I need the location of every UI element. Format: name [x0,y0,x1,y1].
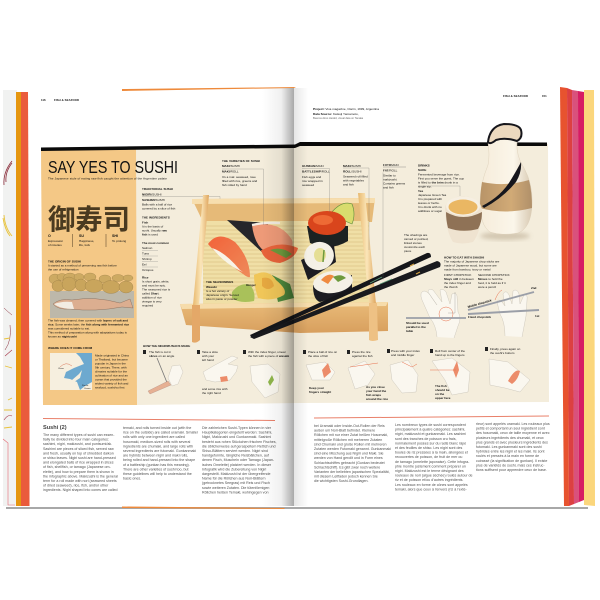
drinks: Tea [418,189,423,193]
seasoning label [206,280,257,301]
step 6: Press with your index [391,349,420,353]
drinks: leaves or herbs. [418,201,440,205]
body text column 4: mit diesem Leitfaden jedoch kennen Sie [314,475,378,479]
chopstick note: linked stones [404,241,422,245]
chopstick hands: table [406,329,413,333]
drinks [418,164,464,213]
origin of sushi: THE ORIGIN OF SUSHI [48,260,81,264]
body text column 1: ingredients. Nigiri shaped into cones are called [43,488,118,492]
body text column 2: temaki, and rolls turned inside out (with the [123,426,191,430]
tray: bamboo mat [203,221,369,304]
body text column 6: des hosomaki, ceux de taille moyenne et avec [476,431,550,435]
body text column 5: riz et de poisson et/ou d'autres ingrédients. [395,478,463,482]
futomaki label: Contains greens [383,182,406,186]
body text column 2: are hybrids between nigiri and maki rolls, [123,454,188,458]
further nigiri steps [303,347,530,401]
body text column 2: basic ones. [123,477,141,481]
body text column 4: Zutaten werden Futomaki genannt. Gunkanmaki [314,447,391,451]
traditional sushi column: vinegar is very [142,300,162,304]
hoso roll label: MAKI/SUSHI [343,164,361,168]
drinks: additives or sugar [418,209,442,213]
body text column 1: The many different types of sushi can essen- [43,433,115,437]
step 4 [303,350,337,394]
body text column 2: several ingredients are futomaki. Gunkanmaki [123,449,196,453]
black top bar [41,142,547,151]
varieties of sushi: filled with rice, greens and [222,179,258,183]
traditional sushi column: Fish [142,220,148,224]
origin of sushi: rice. Some weeks later, the fish along with fermented rice [48,322,129,326]
body text column 3: Shiso-Blättern serviert werden. Nigiri sind [202,449,268,453]
hand one [406,289,466,338]
body text column 2: rice on the outside) are called uramaki. Smaller [123,431,199,435]
step 6 [387,349,420,393]
body text column 6: rieur) sont appelés uramaki. Les rouleaux plus [476,422,550,426]
how to eat with shashi [444,256,510,289]
infographic background panels [41,143,549,405]
body text column 5: Les rouleaux en forme de cônes sont appelés [395,483,468,487]
traditional sushi column: fish is used [142,232,158,236]
body text column 3: besteht aus rohen Stückchen frischen Fisches, [202,440,277,444]
chopstick hands: Fixed chopstick [468,315,491,319]
body text column 2: of a battleship (gunkan has this meaning). [123,463,190,467]
bottom page edge [122,506,285,509]
right running head [503,94,547,98]
traditional sushi column: The most common [142,241,169,245]
body text column 4: mittelgroße Röllchen mit mehreren Zutaten [314,438,382,442]
project credits: Project: Viva magazine, Clarín, 1999, Argentina [313,107,379,111]
step 2: with your [202,354,214,358]
body text column 1: Sashimi are pieces of sliced fish, served raw [43,447,114,451]
where does it come from: cultivation of rice and an [95,374,128,378]
body text column 5: principalement à quatre catégories: sashimi, [395,428,465,432]
chopstick note: The shavings are [404,233,428,237]
where does it come from: climates suitable for the [95,370,127,374]
traditional sushi column: Octopus [142,268,154,272]
futomaki label [383,163,406,280]
seasoning label: Wasabi [206,285,217,289]
map of japan: Pacific [82,385,89,387]
traditional sushi column: required [142,304,153,308]
body text column 2: these guidelines will help to understand the [123,472,192,476]
body text column 3: sowie weiteren Zutaten. Die tütenförmigen [202,486,269,490]
varieties of sushi [222,159,264,225]
body text column 5: nigiri. Makizushi est le terme désignant des [395,469,464,473]
body text column 3: Infografik wird die Zubereitung von Nigiri [202,467,267,471]
traditional sushi column: Salmon [142,246,153,250]
step 8: the sushi's bottom [490,351,515,355]
futomaki label: Similar to [383,174,396,178]
step 4: fingers straight [309,390,331,394]
tray: right foot [369,303,378,341]
step 4: the slice of fish [308,354,328,358]
body text column 3: Nigiri, Makizushi und Gunkanmaki. Sashimi [202,435,271,439]
drinks: single sip. [418,184,432,188]
how to eat with shashi: were a pencil [478,285,496,289]
body text column 5: normalement posées sur du radis blanc râpé [395,441,466,445]
how to eat with shashi: HOW TO EAT WITH SHASHI [444,256,484,260]
step 7: upper face [435,396,451,400]
futomaki label: FUTOMAKI [383,163,399,167]
maki roll front [312,268,354,302]
step 3: the fish with a piece of wasabi [248,354,289,358]
step 7: Roll from center of the [435,349,465,353]
where does it come from: 9th century. There, with [95,366,127,370]
chopsticks [250,253,441,339]
traditional sushi column: The seasoned rice is [142,288,171,292]
body text column 6: plus de variétés de sushi, mais ces instruc- [476,463,545,467]
pronunciation key: To prolong [112,239,127,243]
origin of sushi: This method of preparation along with adaptations today is [48,330,127,334]
drinks: SAKE [418,168,426,172]
tray: left foot [192,305,200,343]
body text column 4: bei Uramaki oder Inside-Out-Rollen der Reis [314,424,385,428]
body text column 4: die wichtigsten Sushi-Grundlagen. [314,479,369,483]
gunkan label: GUNKAN/MAKI [302,164,324,168]
step 5 [347,350,388,401]
traditional sushi column: addition of rice [142,296,162,300]
body text column 3: handgeformte, längliche Reisbällchen, auf [202,454,269,458]
origin of sushi: The fish was cleaned, then covered with layers of salt and [48,318,128,322]
gunkan label: Fish eggs and [302,175,321,179]
step 5: your hand the [366,389,386,393]
chopstick hands: parallel to the [406,325,426,329]
pronunciation key: of niceties [48,243,62,247]
body text column 5: Les nombreux types de sushi correspondent [395,423,466,427]
traditional sushi column: and must be epic. [142,284,166,288]
illustration: stones and fish in rice [49,273,134,318]
where does it come from: seafood, sushi/su first [95,386,125,390]
step 4: Place a ball of rice on [308,350,337,354]
left running head: 116 [41,98,46,102]
origin of sushi: It started as a method of preserving raw fish before [48,264,117,268]
body text column 4: Röllchen mit nur einer Zutat heißen Hosomaki, [314,433,388,437]
drinks: First you serve the guest. The cup [418,176,464,180]
cup [445,196,482,244]
how to eat with shashi: the thumb [444,285,458,289]
how to eat with shashi: The majority of Japanese chop sticks are [444,260,500,264]
body text column 1: elette), and how to prepare them is shown in [43,470,114,474]
chopstick hands: 1st [535,314,539,318]
drinks: Japanese Green Tea [418,193,447,197]
body text column 4: Varianten der beliebten japanischen Spezialität, [314,470,390,474]
chopstick hands: Should be used [406,321,429,325]
body text column 5: sont des tranches de poisson cru frais, [395,437,457,441]
traditional sushi column: Balls with a ball of rice [142,202,172,206]
step 2: left hand [202,358,214,362]
body text column 5: de tamago (omelette japonaise). Cette infogra- [395,460,470,464]
hoso roll label: with vegetables [343,178,364,182]
traditional sushi column: Shrimp [142,257,152,261]
kanji calligraphy: 御寿司 [48,198,130,238]
body text column 3: (getrocknetes Seegras) mit Reis und Fisch [202,481,270,485]
body text column 3: Die zahlreichen Sushi-Typen können in vier [202,426,272,430]
body text column 5: temaki, alors que ceux à l'envers (riz à l'exté- [395,487,467,491]
traditional sushi column: Is short grain, white, [142,280,169,284]
pronunciation key: Happiness, [79,239,94,243]
project credits: Buenos Aires Herald, visual data on Tanaka [313,116,364,120]
body text column 3: denen Fisch, Muscheln oder Tamago (Japan- [202,458,275,462]
chopstick note [404,233,429,253]
gunkan label: rice wrapped in [302,179,323,183]
map of japan: Ocean [84,388,91,390]
gunkan label: BATTLESHIP/ROLL [302,170,330,174]
seasoning label: THE SEASONINGS [206,280,233,284]
body text column 1: term for a roll made with nori (seaweed sheets [43,479,117,483]
seasoning label: Ginger [246,283,257,287]
chopstick hands [406,286,539,338]
traditional sushi column: SASHIMI/SUSHI [142,198,165,202]
how to eat with shashi: Stays still in between [444,277,474,281]
body text column 5: recouvertes de poisson, de fruit de mer ou [395,455,462,459]
step 1: The fish is cut in [149,350,171,354]
how to eat with shashi: food, it is held as if it [478,281,506,285]
tray: right rail [358,193,376,304]
top page edge [122,87,296,91]
seasoning label: Is a hot variety of [206,289,229,293]
how to eat with shashi: FIRST CHOPSTICK [444,273,471,277]
how to eat with shashi: made of Japanese wood, but some are [444,264,497,268]
right page [294,87,563,506]
jug [480,124,532,240]
step 5: Press the rice [352,350,371,354]
gunkan with roe [307,203,354,247]
pronunciation key: SU [79,234,84,238]
origin of sushi [48,260,134,338]
body text column 3: Hauptkategorien eingeteilt werden: Sashimi, [202,431,272,435]
left coloured page stripes [16,92,30,506]
where does it come from: widest variety of fish and [95,382,129,386]
hoso roll label: and fish [343,182,354,186]
right running head: 151 [542,94,547,98]
traditional sushi column: THE INGREDIENTS [142,216,170,220]
how to eat with shashi: the index finger and [444,281,471,285]
where does it come from: or Thailand, but became [95,358,128,362]
left outer page edge with swirls [3,90,17,506]
nigiri [208,236,250,277]
how to eat with shashi: Moves to hold the [478,277,503,281]
origin of sushi: the use of refrigeration [48,268,79,272]
body text column 6: hybrides entre les nigiri et les maki. Ils sont [476,450,545,454]
step 7: should be [435,388,450,392]
body text column 6: petits et comportant un seul ingrédient sont [476,427,545,431]
origin of sushi: was considered suitable to eat. [48,326,90,330]
body text column 5: nigiri, makizushi et gunkanmaki. Les sashimi [395,432,466,436]
chopstick hands: Mobile chopstick [467,298,492,309]
varieties of sushi: MAKI/SUSHI [222,164,240,168]
temaki [227,220,298,263]
step 5: against the fish [352,354,373,358]
map of japan [50,353,92,390]
body text column 4: außen um Nori-Blatt befindet. Kleinere [314,429,375,433]
step 1: slices on an angle [149,354,175,358]
body heading: Sushi (2) [43,425,67,431]
tray: front face [180,302,388,333]
seasoning label: Japanese origin. Served [206,293,239,297]
body text column 2: rolls with only one ingredient are called [123,435,185,439]
where does it come from: WHERE DOES IT COME FROM [48,346,93,350]
chopstick hands: 2nd [531,286,537,290]
traditional sushi column: Tuna [142,252,149,256]
drinks: It is drunk with no [418,205,442,209]
body text column 1: and fresh, usually on top of shredded daikon [43,451,114,455]
chopstick note: carved or pointed, [404,237,429,241]
gutter shading [262,88,308,506]
body text column 6: plusieurs ingrédients des chumaki, et ceux [476,436,544,440]
traditional sushi column: Rice [142,276,149,280]
body text column 2: ingredients are chumaki, and large rolls with [123,444,193,448]
hoso roll label [343,164,369,250]
traditional sushi column: sushi. Usually raw [142,228,168,232]
step 7: on the [435,392,444,396]
varieties of sushi: It's a mat: seaweed, rose [222,175,256,179]
body text column 4: sind Chumaki und große Rollen mit mehreren [314,442,387,446]
title: SAY YES TO SUSHI [48,157,178,177]
left page [28,88,294,506]
body text column 5: boules de riz pressées à la main, allongées et [395,451,468,455]
traditional sushi column: Eel [142,262,147,266]
left running head: FISH & SEAFOOD [54,98,79,102]
pronunciation key: SHI [112,234,118,238]
step 5: around the rice [366,397,388,401]
how to eat with shashi: made from bamboo, ivory or metal [444,268,491,272]
red rule right [314,416,549,418]
step 7: hand up to the fingers [435,353,465,357]
traditional sushi column: NIGIRI/SUSHI [142,192,162,196]
drinks: DRINKS [418,164,430,168]
where does it come from: popular in Japan in the [95,362,126,366]
sake jug and cup [445,124,532,244]
step 8 [485,347,530,392]
body text column 3: dargestellt. Makizushi ist der übergreifende [202,472,271,476]
traditional sushi column: TRADITIONAL SUSHI [142,187,173,191]
chopstick note: customize each [404,245,425,249]
project credits: Data Source: Katsuji Yamamoto, [313,112,359,116]
body text column 2: There are other varieties of sushi too, but [123,467,189,471]
body text column 4: werden von Hand gerollt und in Form eines [314,456,383,460]
body text column 1: of fish, shellfish, or tamago (Japanese om- [43,465,112,469]
body text column 3: die üblicherweise auf geraspeltem Rettich und [202,444,276,448]
step 3 [243,350,289,398]
step 4: Keep your [309,386,325,390]
how the nigirizushi is made [143,344,289,398]
step 2: the right hand [202,391,221,395]
body text column 1: sashimi, nigiri, makizushi, and puntsumi/ak. [43,442,112,446]
body text column 4: Schlachtschiff). Es gibt zwar noch weitere [314,465,380,469]
pronunciation key [48,234,127,247]
where does it come from: Made originated in China [95,354,129,358]
body text column 6: roulés et pressés à la main en forme de [476,454,539,458]
gunkan label [302,164,330,212]
right running head: FISH & SEAFOOD [503,94,528,98]
drinks: is filled to the brim drunk in a [418,180,458,184]
body text column 5: et des feuilles de shiso. Les nigiri sont des [395,446,463,450]
body text column 4: sind eine Mischung aus Nigiri und Maki. Sie [314,452,384,456]
hoso roll label: Seaweed roll filled [343,174,368,178]
futomaki label: makizushi. [383,178,398,182]
drinks: It is prepared with [418,197,442,201]
varieties of sushi: THE VARIETIES OF SUSHI [222,159,260,163]
where does it come from [48,346,129,390]
body text column 1: tially be divided into four main categories: [43,438,109,442]
how to eat with shashi: SECOND CHOPSTICK [478,273,510,277]
step 2: Take a slice [202,350,218,354]
traditional sushi column: called Shari, [142,292,159,296]
step 1 [143,350,183,394]
subtitle: The Japanese style of eating raw fish caught the attention of the Argentine palate [48,176,167,180]
book shadow [6,507,588,509]
body text column 4: Schlachtschiffes gebracht (Gunkan bedeutet [314,461,385,465]
pronunciation key: life, luck [79,243,90,247]
pronunciation key: O [48,234,51,238]
tray: left rail [193,195,209,305]
varieties of sushi: fish rolled by hand [222,183,247,187]
body text column 2: hosomaki, medium-sized rolls with several [123,440,191,444]
body text column 1: and elongated balls of rice wrapped in slices [43,461,114,465]
traditional sushi column: covered by a slice of fish [142,206,176,210]
ginger and wasabi [232,272,294,302]
where does it come from: ocean that provided the [95,378,127,382]
maki roll back [300,238,338,280]
drinks: Fermented beverage from rice. [418,172,460,176]
varieties of sushi: MAKI/ROLL [222,170,239,174]
body text column 3: isches Omelette) platziert werden. In dieser [202,463,272,467]
step 5: As you close [366,385,385,389]
red rule left [43,418,275,420]
futomaki label: FAT/ROLL [383,168,398,172]
body text column 5: phie montre justement comment préparer un [395,464,466,468]
hoso roll label: ROLL/SUSHI [343,170,362,174]
origin of sushi: known as nigirizushi [48,334,77,338]
body text column 6: plus grands et avec plusieurs ingrédients des [476,440,548,444]
body text column 6: tions suffisent pour apprendre ceux de base. [476,468,547,472]
pronunciation key: Expression [48,239,63,243]
step 6: and middle finger [391,353,414,357]
traditional sushi column: It is the basis of [142,224,163,228]
body text column 6: cuirassé (la signification de gunkan). Il existe [476,459,547,463]
body text column 5: rouleaux de nori (algue séchée) roulés autour de [395,474,473,478]
body text column 2: being rolled and hand-pressed into the shape [123,458,195,462]
step 2: and some rice with [202,387,228,391]
left running head [41,98,79,102]
step 7: The fish [435,384,447,388]
seasoning label: also in paste or powder [206,297,238,301]
body text column 6: futomaki. Les gunkanmaki sont des sushi [476,445,542,449]
step 2 [197,350,238,395]
traditional sushi column [142,187,220,308]
how the nigirizushi is made: HOW THE NIGIRIZUSHI IS MADE [143,344,190,348]
step 7 [430,349,470,400]
hand two [468,290,539,337]
body text column 1: of dried seaweed), rice, fish, and/or other [43,484,109,488]
step 3: With the index finger, smear [248,350,286,354]
body text column 1: or shiso leaves. Nigiri sushi are hand-pressed [43,456,116,460]
right coloured page stripes [560,87,595,506]
sushi tray photo [180,193,388,343]
map of japan: China [58,368,64,370]
tray: back wall [192,198,375,224]
futomaki label: and fish [383,186,394,190]
step 5: fish wraps [366,393,381,397]
body text column 3: Röllchen heißen Temaki, wohingegen von [202,490,268,494]
body text column 1: the infographic above. Makizushi is the general [43,474,118,478]
chopstick note: piece [404,249,412,253]
body text column 3: Name für die Röllchen aus Nori-Blättern [202,477,266,481]
step 8: Finally, press again on [490,347,521,351]
gunkan label: seaweed [302,183,315,187]
project credits [313,107,379,120]
